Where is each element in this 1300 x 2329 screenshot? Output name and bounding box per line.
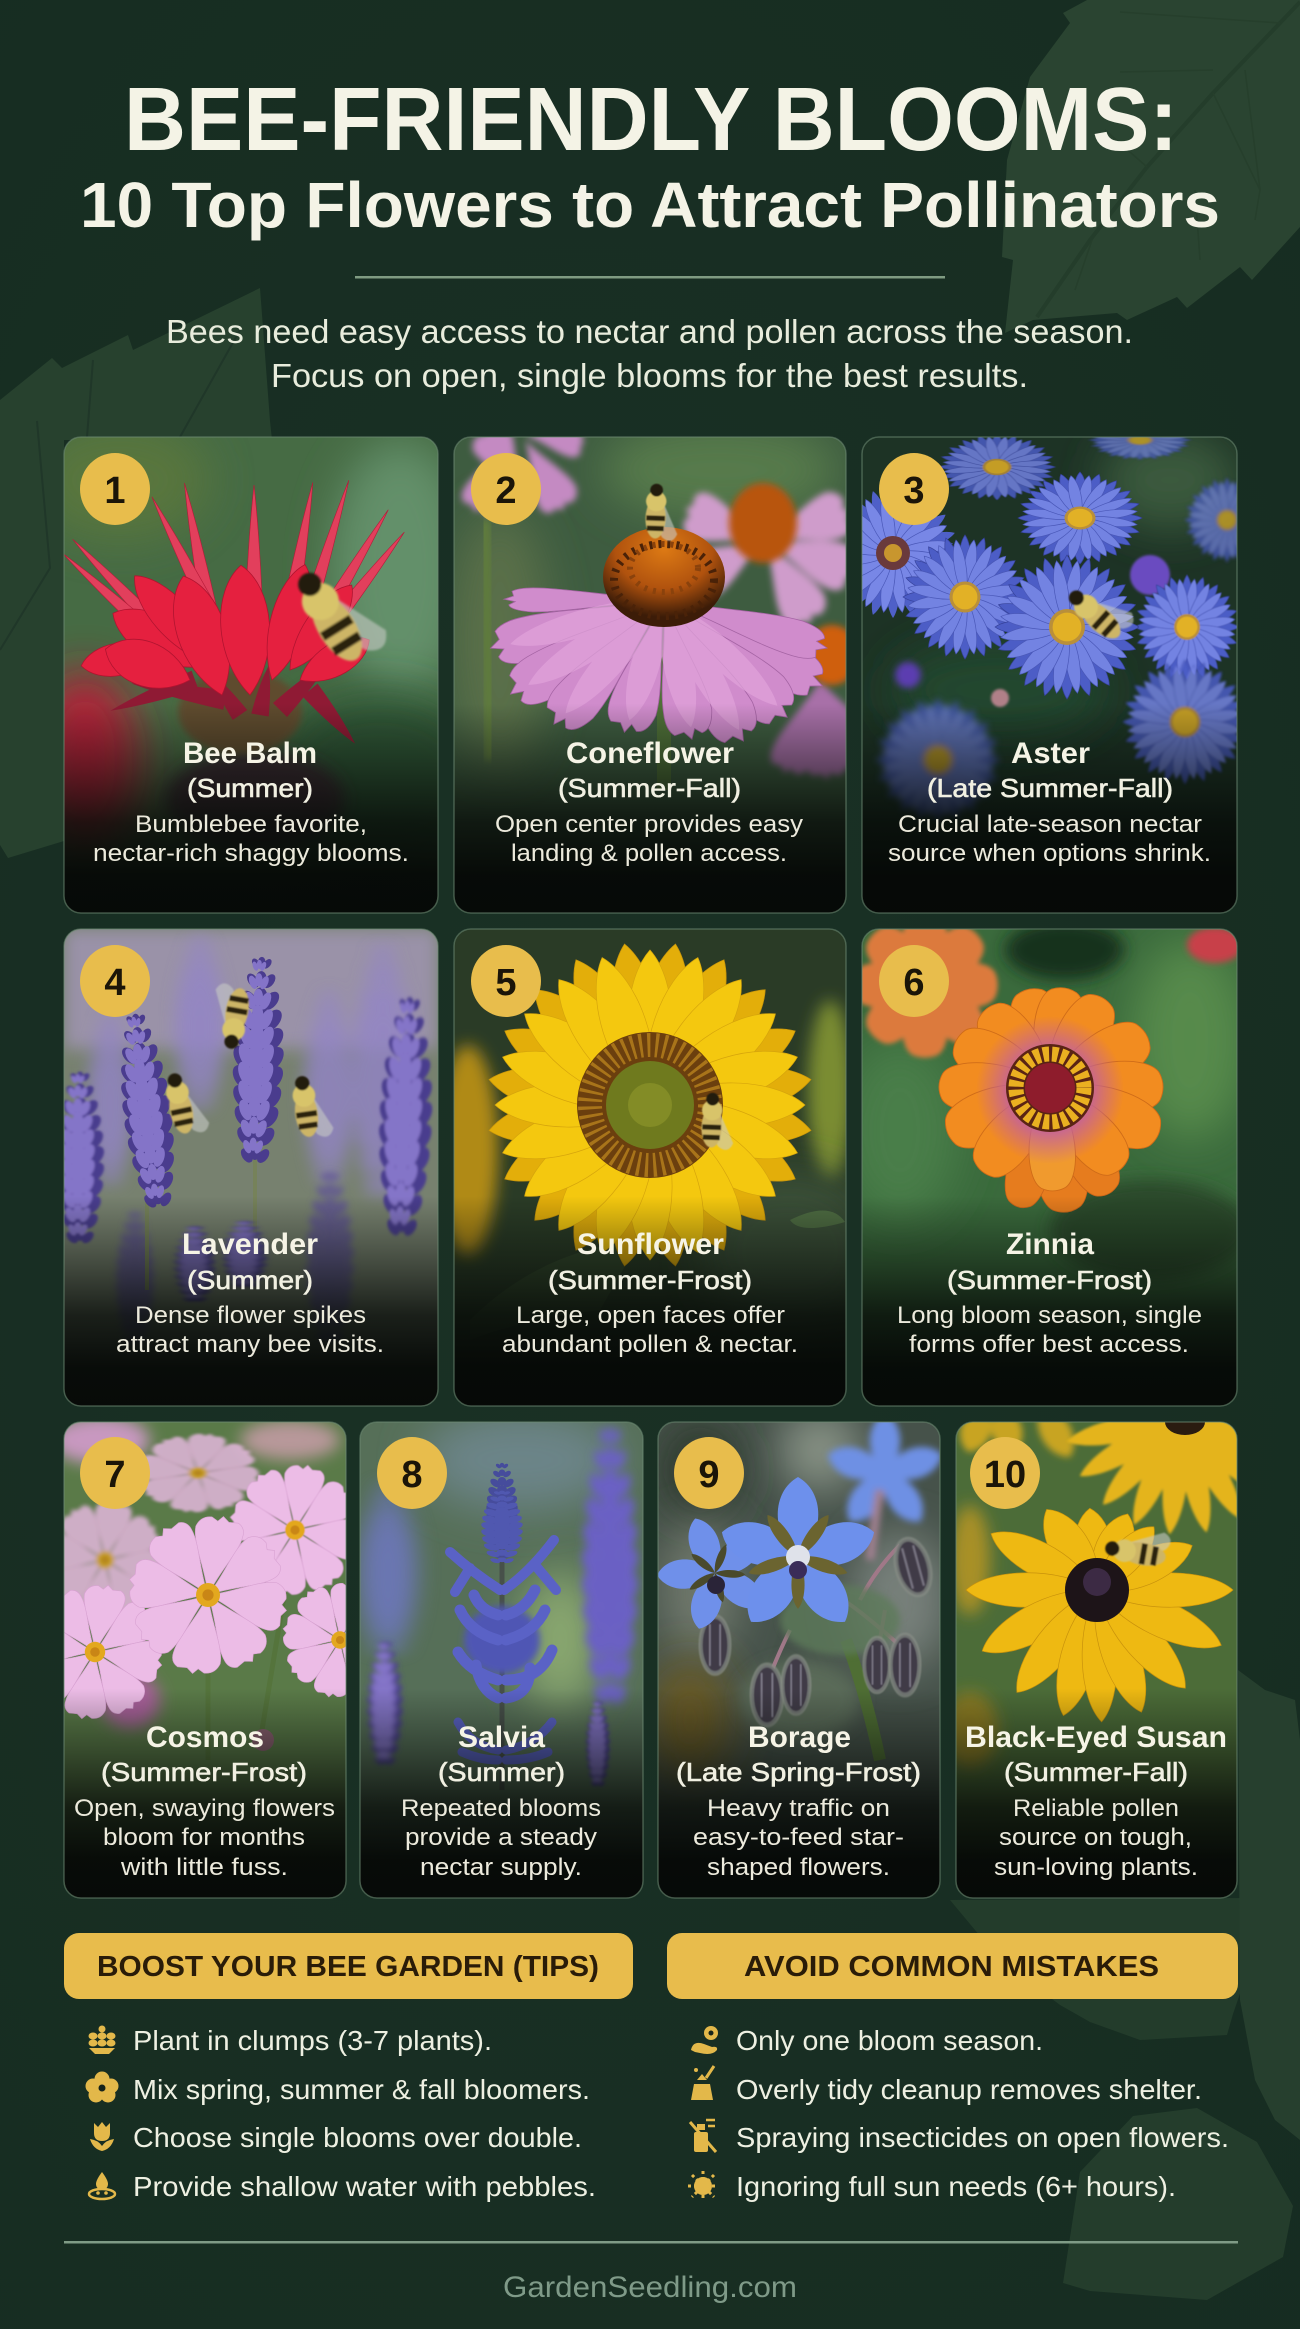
description: Large, open faces offer (516, 1302, 785, 1329)
season: (Summer) (187, 1265, 313, 1295)
icon: hand with flower (691, 2026, 718, 2054)
number badge 1 (80, 453, 150, 525)
number badge 6: 6 (903, 962, 925, 1004)
number badge 10: 10 (984, 1454, 1026, 1496)
photo: bee balm (64, 437, 438, 913)
photo: coneflower (454, 437, 846, 913)
name: Aster (1011, 737, 1090, 770)
intro text: Bees need easy access to nectar and pollen across the season. (166, 313, 1133, 350)
intro text (166, 313, 1133, 394)
mistakes heading (667, 1933, 1238, 1999)
name: Salvia (458, 1721, 545, 1754)
photo: cosmos (64, 1422, 346, 1898)
icon: cleanup (691, 2066, 714, 2100)
description: nectar-rich shaggy blooms. (93, 840, 409, 867)
icon: no spray (690, 2120, 716, 2152)
description: Bumblebee favorite, (135, 811, 367, 838)
description: landing & pollen access. (511, 840, 787, 867)
photo: black-eyed susan (956, 1422, 1237, 1898)
description: Reliable pollen (1013, 1795, 1179, 1822)
description: Long bloom season, single (897, 1302, 1202, 1329)
icon: sun (688, 2171, 718, 2201)
description: Crucial late-season nectar (898, 811, 1202, 838)
season: (Late Spring-Frost) (676, 1757, 921, 1787)
photo: lavender (52, 929, 441, 1406)
season: (Summer-Frost) (548, 1265, 752, 1295)
description: abundant pollen & nectar. (502, 1331, 798, 1358)
description (93, 811, 409, 867)
description (897, 1302, 1202, 1358)
description (495, 811, 804, 867)
panel: card 1 Bee Balm (63, 436, 439, 914)
number badge 3: 3 (903, 470, 925, 512)
season: (Summer-Fall) (558, 773, 741, 803)
season: (Summer-Frost) (947, 1265, 1152, 1295)
description: nectar supply. (420, 1854, 582, 1881)
panel: card 8 Salvia (352, 1410, 643, 1898)
mistakes heading: AVOID COMMON MISTAKES (744, 1951, 1159, 1983)
description: attract many bee visits. (116, 1331, 384, 1358)
description: shaped flowers. (707, 1854, 890, 1881)
description (693, 1795, 904, 1881)
number badge 5 (471, 945, 541, 1017)
description (888, 811, 1211, 867)
number badge 2: 2 (495, 470, 517, 512)
description: Repeated blooms (401, 1795, 601, 1822)
description (116, 1302, 384, 1358)
tips heading: BOOST YOUR BEE GARDEN (TIPS) (97, 1951, 599, 1983)
number badge 4: 4 (104, 962, 126, 1004)
number badge 4 (80, 945, 150, 1017)
subtitle: 10 Top Flowers to Attract Pollinators (80, 169, 1220, 241)
mistake 3: Spraying insecticides on open flowers. (736, 2122, 1229, 2153)
photo: salvia (352, 1410, 643, 1898)
photo: zinnia (862, 929, 1237, 1406)
mistake 4: Ignoring full sun needs (6+ hours). (736, 2171, 1176, 2202)
description: sun-loving plants. (994, 1854, 1198, 1881)
description (502, 1302, 798, 1358)
number badge 3 (879, 453, 949, 525)
panel: card 5 Sunflower (453, 928, 847, 1407)
description: bloom for months (103, 1824, 305, 1851)
description (994, 1795, 1198, 1881)
panel: card 2 Coneflower (453, 436, 847, 914)
tip 4: Provide shallow water with pebbles. (133, 2171, 596, 2202)
number badge 6 (879, 945, 949, 1017)
photo: borage (658, 1422, 940, 1898)
panel: card 4 Lavender (52, 929, 441, 1406)
season: (Late Summer-Fall) (927, 773, 1173, 803)
panel: card 10 Black-Eyed Susan (955, 1421, 1238, 1899)
number badge 9: 9 (698, 1454, 720, 1496)
description: Open center provides easy (495, 811, 804, 838)
name: Cosmos (146, 1721, 264, 1754)
description: easy-to-feed star- (693, 1824, 904, 1851)
description: with little fuss. (120, 1854, 288, 1881)
season: (Summer-Frost) (101, 1757, 307, 1787)
decorative leaf: left (0, 288, 272, 858)
description: forms offer best access. (909, 1331, 1189, 1358)
description: source when options shrink. (888, 840, 1211, 867)
description (74, 1795, 335, 1881)
description: Open, swaying flowers (74, 1795, 335, 1822)
panel: card 3 Aster (861, 436, 1238, 914)
tip 1: Plant in clumps (3-7 plants). (133, 2025, 492, 2056)
name: Sunflower (577, 1228, 724, 1261)
footer: GardenSeedling.com (503, 2271, 797, 2304)
number badge 8 (377, 1437, 447, 1509)
decorative leaf: top right (1002, 0, 1300, 333)
photo: sunflower (454, 929, 846, 1406)
description: provide a steady (405, 1824, 598, 1851)
panel: tips (64, 1933, 633, 2202)
number badge 7 (80, 1437, 150, 1509)
number badge 2 (471, 453, 541, 525)
name: Zinnia (1006, 1228, 1094, 1261)
panel: card 9 Borage (657, 1421, 941, 1899)
name: Coneflower (566, 737, 734, 770)
name: Lavender (182, 1228, 318, 1261)
panel: mistakes (667, 1933, 1238, 2202)
icon: single bloom (90, 2122, 114, 2151)
title: BEE-FRIENDLY BLOOMS: (124, 70, 1178, 170)
icon: water with pebbles (89, 2172, 115, 2199)
mistake 2: Overly tidy cleanup removes shelter. (736, 2074, 1202, 2105)
season: (Summer) (438, 1757, 565, 1787)
name: Borage (748, 1721, 851, 1754)
description: Dense flower spikes (135, 1302, 366, 1329)
description: Heavy traffic on (707, 1795, 890, 1822)
name: Bee Balm (183, 737, 317, 770)
description: source on tough, (999, 1824, 1192, 1851)
description (401, 1795, 601, 1881)
photo: asters (862, 437, 1237, 913)
number badge 1: 1 (104, 470, 126, 512)
season: (Summer-Fall) (1004, 1757, 1188, 1787)
panel: card 7 Cosmos (63, 1421, 347, 1899)
tips heading (64, 1933, 633, 1999)
number badge 8: 8 (401, 1454, 423, 1496)
panel: card 6 Zinnia (861, 928, 1238, 1407)
number badge 5: 5 (495, 962, 517, 1004)
number badge 9 (674, 1437, 744, 1509)
intro text: Focus on open, single blooms for the best results. (271, 357, 1028, 394)
mistake 1: Only one bloom season. (736, 2025, 1043, 2056)
number badge 10 (970, 1437, 1040, 1509)
icon: flower (86, 2072, 118, 2102)
icon: clumps (88, 2026, 116, 2054)
tip 3: Choose single blooms over double. (133, 2122, 582, 2153)
tip 2: Mix spring, summer & fall bloomers. (133, 2074, 590, 2105)
decorative leaves: bottom right (950, 1670, 1300, 2300)
season: (Summer) (187, 773, 313, 803)
name: Black-Eyed Susan (965, 1721, 1227, 1754)
number badge 7: 7 (104, 1454, 126, 1496)
